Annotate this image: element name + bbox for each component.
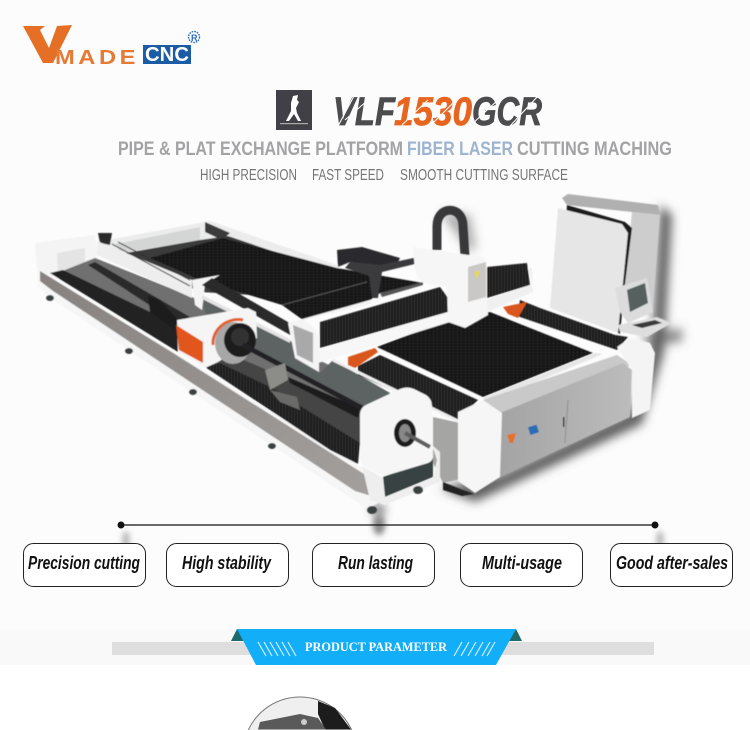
gantry arm <box>345 256 423 298</box>
subheading features: FAST SPEED <box>312 167 384 184</box>
model name: 1530 <box>394 90 472 134</box>
sheet table rear frame <box>98 221 340 300</box>
machine feet <box>46 295 423 514</box>
far white corner <box>617 338 655 418</box>
logo word: MADE: MADE <box>55 47 139 69</box>
cabinet logo <box>507 425 539 443</box>
middle table support <box>202 295 390 407</box>
tube support roller <box>265 363 300 410</box>
gantry beam <box>288 263 533 372</box>
rear table bed <box>150 238 423 320</box>
white side rail <box>97 241 192 298</box>
rail slide lines <box>112 242 190 286</box>
front table bed <box>377 312 593 397</box>
near bellows <box>358 355 478 420</box>
model name: GCR <box>472 90 542 134</box>
front table slot <box>483 353 603 402</box>
table seam <box>282 282 367 305</box>
machine illustration <box>35 194 682 522</box>
control cabinet <box>550 194 660 334</box>
banner hatching <box>258 642 495 656</box>
headline: FIBER LASER <box>407 139 513 160</box>
base opening <box>433 417 472 483</box>
orange accent far <box>503 302 527 318</box>
long side rail <box>37 268 380 509</box>
feature pill: multi-usage <box>460 544 582 586</box>
subheading features: HIGH PRECISION <box>200 167 297 184</box>
headline: CUTTING MACHING <box>517 139 672 160</box>
orange accent near <box>348 348 378 368</box>
feature pill: precision cutting: Precision cutting <box>28 553 140 573</box>
strip beneath tube <box>288 377 360 418</box>
rear gantry head <box>337 247 400 268</box>
model name <box>333 90 542 134</box>
tube bed end block <box>35 235 98 280</box>
cable carrier <box>437 210 465 256</box>
logo <box>23 25 200 69</box>
feature pill: run lasting <box>312 544 434 586</box>
operator panel <box>615 278 672 337</box>
feature pill: multi-usage: Multi-usage <box>482 553 562 573</box>
gantry frame bar <box>380 282 423 297</box>
section banner: product parameter: PRODUCT PARAMETER <box>305 639 448 654</box>
logo mark: V <box>23 25 72 63</box>
front bellows on tube bed <box>50 270 178 352</box>
feature pill: precision cutting <box>24 544 146 586</box>
feature pill: good after-sales <box>610 544 732 586</box>
model name: VLF <box>333 90 396 134</box>
machine shadow <box>370 205 682 522</box>
clamp ring on tube bed <box>148 296 178 332</box>
feature pill: run lasting: Run lasting <box>338 553 413 573</box>
section banner: product parameter <box>0 629 750 665</box>
white rail beside near bellows <box>333 360 460 422</box>
rear bellows on tube bed <box>88 262 190 323</box>
headline: PIPE & PLAT EXCHANGE PLATFORM <box>118 139 403 160</box>
shadows under connector dots <box>122 515 664 549</box>
near white corner <box>458 400 502 493</box>
middle bellows beam <box>192 275 293 343</box>
cabinet base <box>483 355 632 477</box>
feature pill: high stability: High stability <box>182 553 272 573</box>
detail photo circle <box>248 697 352 730</box>
registered mark <box>188 32 200 43</box>
tube chuck housing <box>176 308 257 368</box>
area below tube <box>205 350 362 445</box>
feature pill: high stability <box>166 544 288 586</box>
black tube bed <box>205 363 360 464</box>
tube workpiece <box>243 345 362 408</box>
laser head <box>413 247 488 328</box>
headline <box>118 139 672 160</box>
tailstock housing <box>360 388 440 505</box>
connector line <box>118 522 658 528</box>
registered mark: R <box>191 33 198 43</box>
subheading features <box>200 167 568 184</box>
sheet table far bellows <box>517 300 628 350</box>
tube bed trough <box>60 258 382 445</box>
subheading features: SMOOTH CUTTING SURFACE <box>400 167 568 184</box>
logo badge: CNC: CNC <box>145 44 189 66</box>
icon: dark badge with figure <box>276 90 312 130</box>
